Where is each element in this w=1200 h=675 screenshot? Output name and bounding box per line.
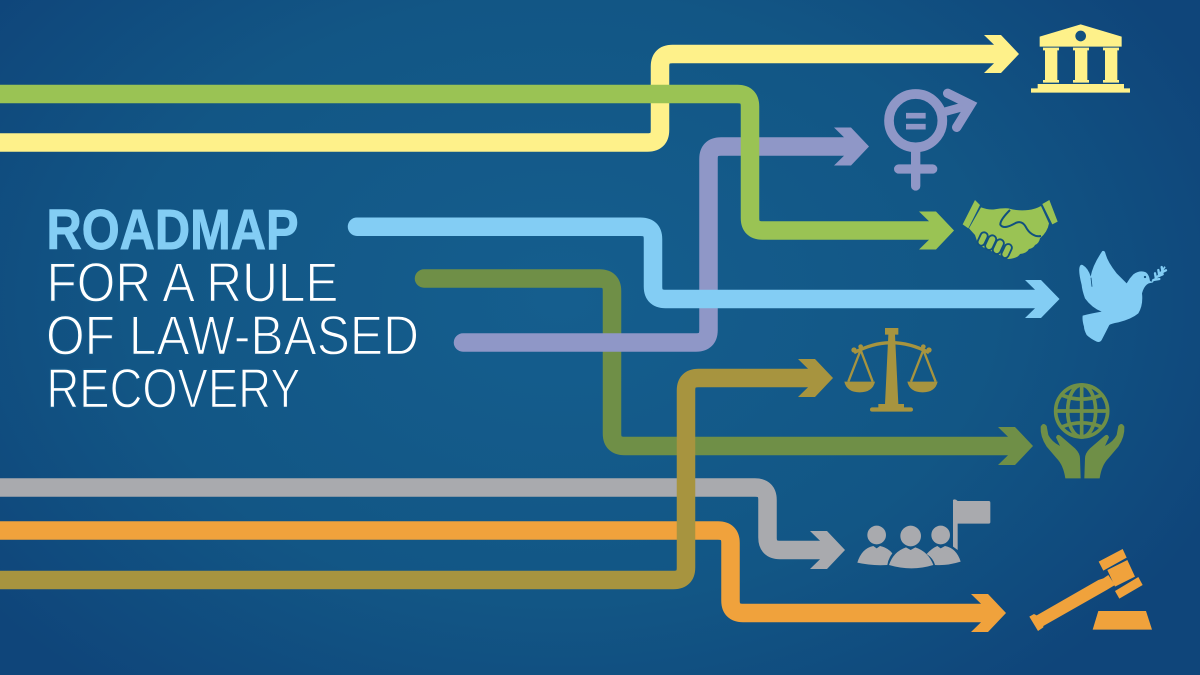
icon: scales of justice	[844, 328, 938, 412]
arrow: dark green to global hands	[424, 278, 1033, 465]
icon: gavel	[1029, 549, 1152, 631]
icon: peace dove	[1079, 251, 1166, 342]
arrow: grey to community	[0, 488, 845, 569]
arrow: gold to scales	[0, 359, 833, 580]
arrow: orange to gavel	[0, 530, 1006, 632]
icon: handshake	[963, 200, 1058, 259]
title line: of law-based: OF LAW-BASED	[46, 304, 419, 366]
arrow: yellow to institutions	[0, 35, 1019, 142]
icon: globe in hands	[1041, 385, 1124, 478]
title	[46, 198, 419, 420]
title line: for a rule: FOR A RULE	[46, 250, 338, 314]
title: ROADMAP: ROADMAP	[46, 198, 298, 262]
title line: recovery: RECOVERY	[46, 356, 300, 420]
icon: institution building	[1031, 24, 1130, 93]
icon: gender equality	[889, 93, 971, 186]
arrow: green to handshake	[0, 94, 954, 250]
icon: community with flag	[857, 499, 990, 568]
arrow: light blue to peace dove	[357, 227, 1060, 318]
arrow: purple to gender equality	[463, 128, 869, 342]
